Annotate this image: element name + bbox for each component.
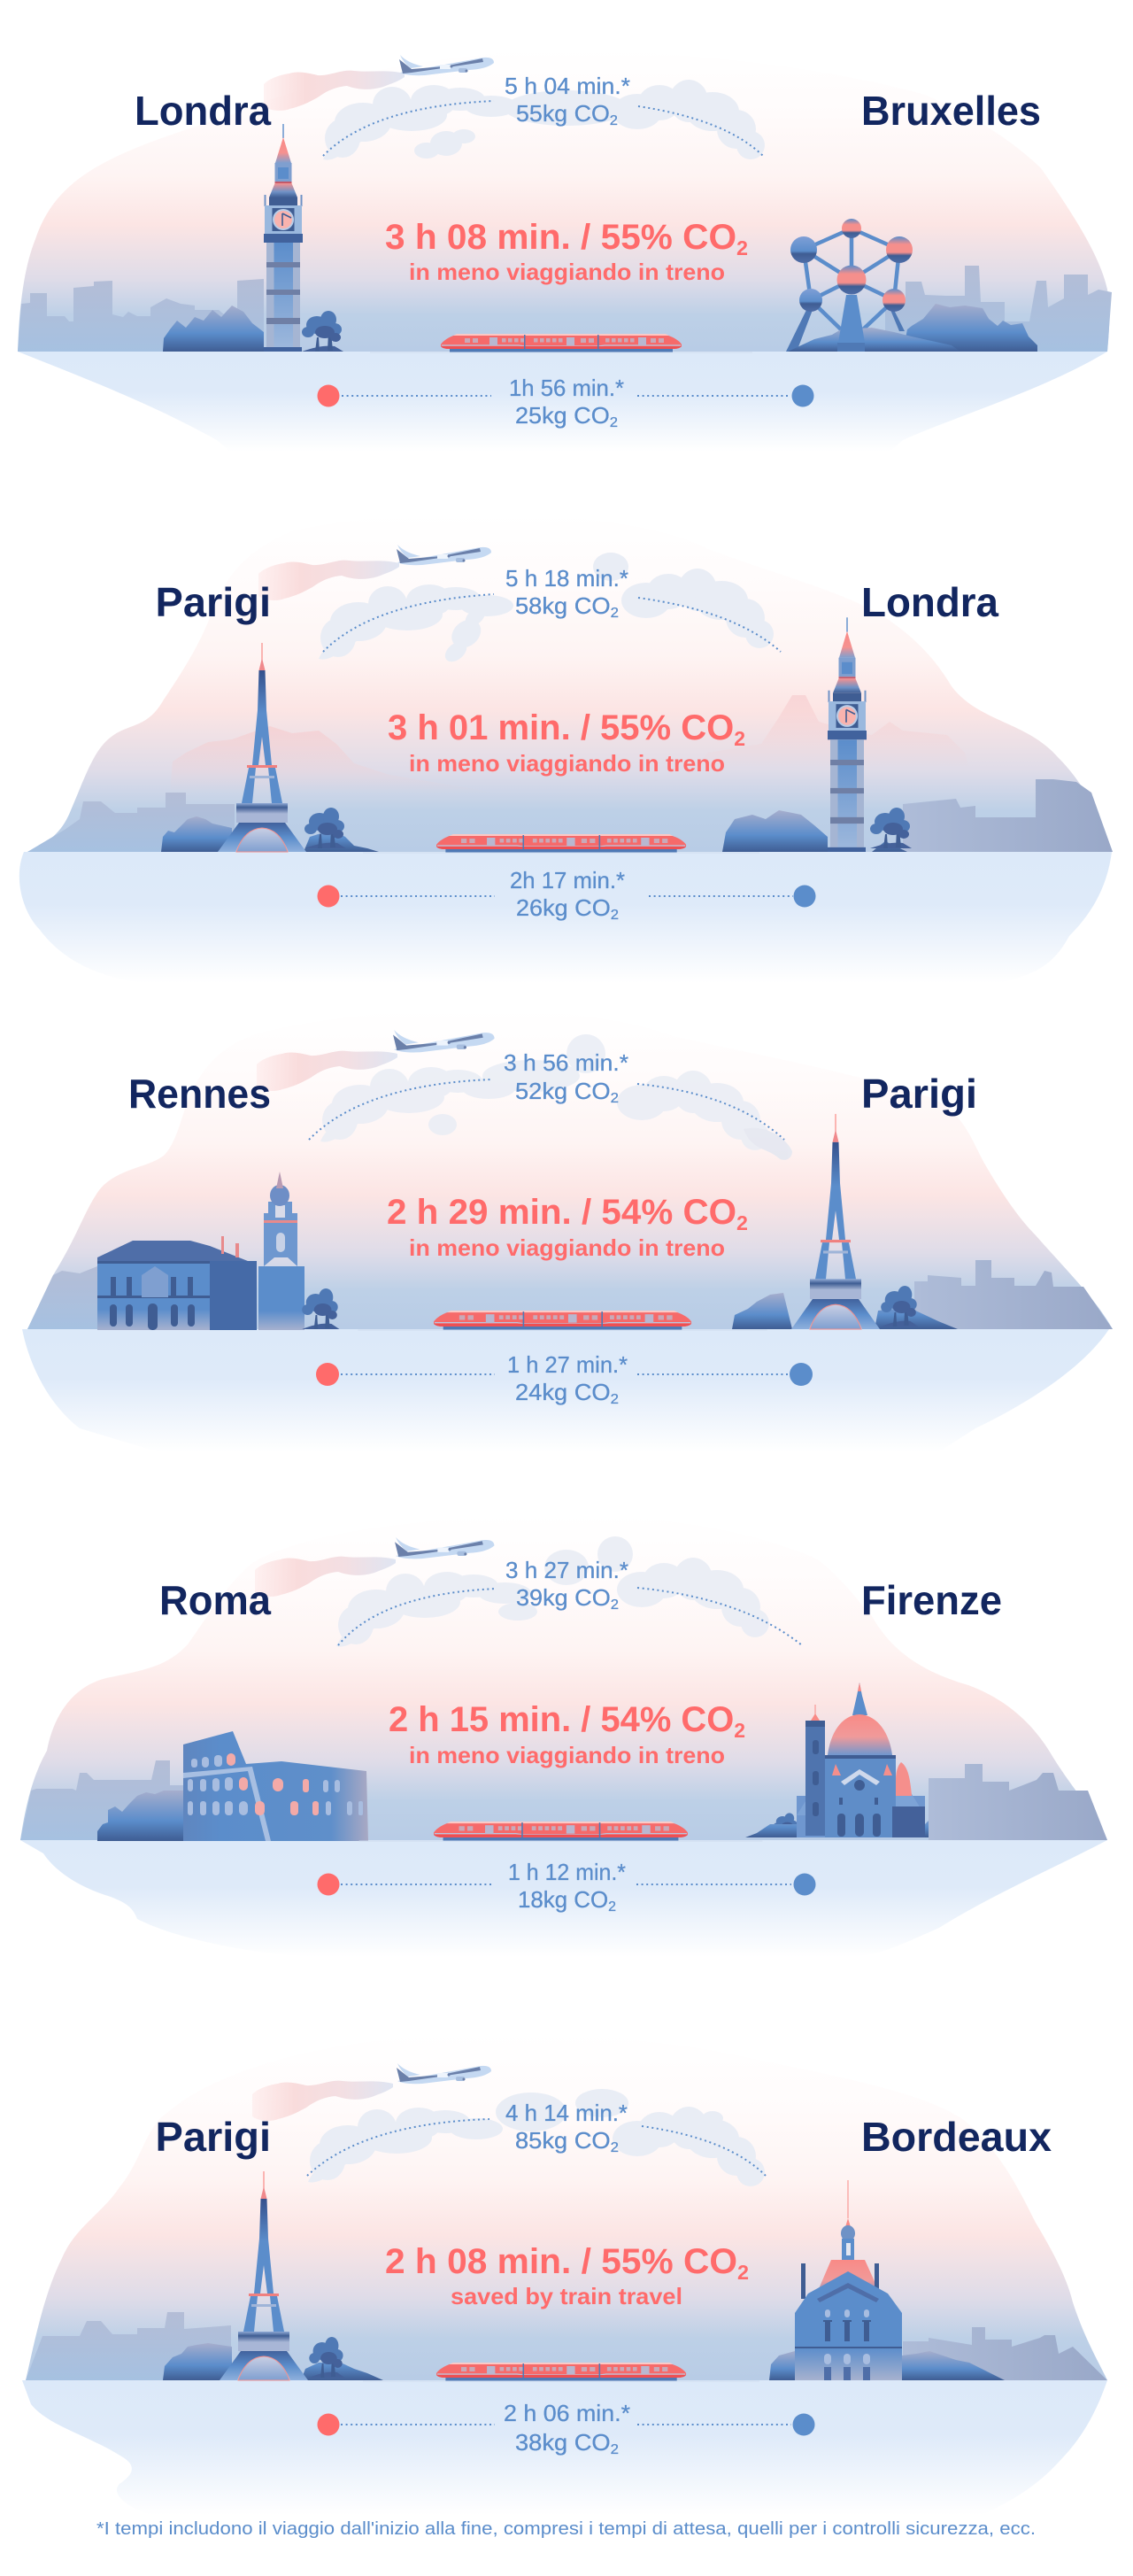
rail line right (636, 1884, 791, 1885)
clouds (336, 1536, 769, 1647)
flight time: 4 h 14 min.* (505, 2100, 628, 2126)
water backdrop (18, 352, 1107, 452)
water backdrop (20, 1840, 1107, 1957)
saving caption: in meno viaggiando in treno (409, 1234, 725, 1261)
flight path left (307, 2119, 489, 2176)
flight time: 3 h 27 min.* (505, 1557, 628, 1583)
icon: Big Ben (264, 124, 303, 352)
panel: Rennes to Parigi (22, 1009, 1113, 1452)
flight path left (309, 1079, 491, 1140)
flight CO2: 2 (611, 2140, 619, 2155)
bushes right (722, 810, 907, 852)
icon: Florence cathedral (797, 1683, 925, 1837)
saving headline: 2 (736, 1211, 748, 1234)
title: destination: Londra (861, 579, 998, 625)
flight path right (638, 598, 781, 652)
saving caption: saved by train travel (451, 2283, 682, 2309)
flight CO2: 2 (611, 1091, 619, 1106)
flight time: 3 h 56 min.* (504, 1049, 628, 1076)
contrail (252, 2081, 393, 2121)
flight CO2: 52kg CO (515, 1078, 606, 1104)
sky backdrop (27, 1009, 1113, 1329)
contrail (257, 1051, 397, 1091)
icon: train (363, 834, 759, 853)
saving caption: in meno viaggiando in treno (409, 259, 725, 285)
bushes right (903, 304, 1037, 352)
marker: destination (793, 2414, 814, 2435)
clouds (320, 1034, 792, 1160)
icon: tree (774, 1813, 798, 1837)
saving headline: 2 (734, 727, 745, 750)
train CO2: 2 (611, 2442, 619, 2457)
rail line left (341, 1373, 495, 1375)
train time: 2 h 06 min.* (504, 2400, 630, 2426)
train CO2: 2 (611, 1392, 619, 1407)
bushes left (161, 816, 379, 852)
train time: 1 h 12 min.* (508, 1859, 626, 1885)
clouds (319, 553, 774, 666)
marker: destination (793, 1874, 816, 1895)
title: destination: Bordeaux (861, 2114, 1052, 2160)
icon: plane (397, 2063, 491, 2084)
skyline right (885, 266, 1112, 352)
saving headline: 2 (737, 2261, 749, 2284)
rail line right (637, 1373, 788, 1375)
panel: Londra to Bruxelles (18, 49, 1112, 452)
flight CO2: 39kg CO (516, 1584, 607, 1611)
saving caption: in meno viaggiando in treno (409, 1742, 725, 1768)
flight CO2: 58kg CO (515, 592, 606, 619)
marker: origin (317, 384, 340, 407)
icon: plane (393, 1030, 495, 1053)
train time: 1h 56 min.* (509, 375, 624, 401)
flight CO2: 2 (610, 113, 618, 128)
flight path left (323, 101, 494, 156)
flight path right (642, 2126, 767, 2178)
rail line left (341, 2424, 495, 2425)
marker: origin (317, 2414, 340, 2435)
rail line right (637, 395, 788, 397)
title: destination: Firenze (861, 1577, 1002, 1623)
contrail (258, 561, 399, 600)
skyline right (929, 1764, 1107, 1840)
icon: plane (397, 545, 491, 565)
skyline left (18, 279, 264, 352)
icon: Eiffel Tower (791, 1114, 880, 1329)
pink mountains (170, 695, 969, 793)
icon: Eiffel Tower (220, 2171, 308, 2380)
icon: train (358, 1311, 767, 1330)
water backdrop (19, 852, 1112, 983)
sky backdrop (27, 514, 1113, 852)
marker: origin (317, 886, 340, 907)
marker: destination (791, 384, 814, 407)
skyline left (27, 1266, 97, 1329)
saving headline: 2 h 15 min. / 54% CO (389, 1700, 735, 1739)
train CO2: 25kg CO (515, 402, 606, 429)
sky backdrop (26, 2034, 1107, 2380)
marker: destination (793, 886, 816, 907)
water backdrop (22, 2380, 1107, 2515)
train CO2: 26kg CO (516, 894, 607, 921)
train time: 1 h 27 min.* (507, 1351, 628, 1378)
icon: tree (302, 311, 343, 352)
title: origin: Parigi (156, 579, 271, 625)
saving caption: in meno viaggiando in treno (409, 750, 725, 777)
sky backdrop (18, 49, 1109, 352)
rail line right (649, 895, 793, 897)
title: origin: Parigi (156, 2114, 271, 2160)
skyline left (20, 1760, 186, 1840)
contrail (264, 71, 405, 111)
flight path right (638, 106, 763, 156)
icon: tree (309, 2337, 344, 2378)
rail line left (341, 895, 495, 897)
icon: plane (395, 1537, 494, 1559)
marker: origin (316, 1363, 339, 1386)
train CO2: 2 (608, 1899, 616, 1915)
flight path right (637, 1084, 784, 1140)
panel: Parigi to Bordeaux (22, 2034, 1107, 2515)
flight path left (323, 594, 494, 652)
icon: Colosseum (183, 1731, 368, 1841)
flight time: 5 h 04 min.* (505, 73, 630, 99)
flight path right (637, 1588, 802, 1645)
saving headline: 3 h 08 min. / 55% CO (385, 218, 731, 257)
sky backdrop (20, 1514, 1107, 1840)
saving headline: 3 h 01 min. / 55% CO (388, 708, 734, 747)
bushes left (97, 1791, 183, 1841)
icon: Atomium (786, 219, 960, 352)
clouds (308, 2089, 765, 2186)
icon: tree (304, 808, 346, 848)
title: destination: Bruxelles (861, 88, 1041, 134)
bushes right (745, 1811, 967, 1837)
train CO2: 18kg CO (518, 1886, 609, 1913)
skyline right (903, 2327, 1107, 2380)
water backdrop (22, 1329, 1109, 1452)
skyline left (27, 793, 235, 852)
title: origin: Roma (159, 1577, 271, 1623)
rail line right (637, 2424, 791, 2425)
train CO2: 2 (610, 415, 618, 430)
title: origin: Londra (135, 88, 271, 134)
icon: tree (870, 808, 912, 848)
icon: plane (399, 55, 494, 75)
saving headline: 2 h 08 min. / 55% CO (385, 2242, 731, 2281)
skyline left (26, 2312, 231, 2380)
bushes left (163, 2343, 383, 2380)
bushes right (769, 2351, 1005, 2380)
icon: Big Ben (828, 617, 867, 852)
flight time: 5 h 18 min.* (505, 565, 628, 592)
rail line left (342, 395, 491, 397)
rail line left (341, 1884, 491, 1885)
title: origin: Rennes (128, 1071, 271, 1117)
icon: tree (881, 1286, 919, 1327)
saving headline: 2 (736, 236, 748, 259)
train CO2: 24kg CO (515, 1379, 606, 1405)
train time: 2h 17 min.* (510, 867, 625, 893)
icon: train (363, 2363, 759, 2381)
flight CO2: 55kg CO (516, 100, 607, 127)
flight CO2: 85kg CO (515, 2127, 606, 2154)
icon: train (359, 1822, 762, 1841)
marker: destination (790, 1363, 813, 1386)
train CO2: 2 (611, 908, 619, 923)
icon: train (370, 334, 752, 352)
contrail (255, 1557, 396, 1597)
flight CO2: 2 (611, 1597, 619, 1613)
marker: origin (317, 1874, 340, 1895)
flight CO2: 2 (611, 606, 619, 621)
icon: Eiffel Tower (218, 643, 306, 852)
icon: Bordeaux building (795, 2180, 902, 2380)
title: destination: Parigi (861, 1071, 977, 1117)
flight path left (338, 1589, 497, 1645)
clouds (323, 80, 765, 160)
saving headline: 2 h 29 min. / 54% CO (387, 1193, 733, 1232)
skyline right (903, 779, 1113, 852)
train CO2: 38kg CO (515, 2429, 606, 2456)
panel: Roma to Firenze (20, 1514, 1107, 1957)
icon: Rennes town hall (97, 1172, 304, 1330)
bushes left (163, 306, 264, 352)
icon: tree (302, 1288, 340, 1329)
footnote: *I tempi includono il viaggio dall'inizio alla fine, compresi i tempi di attesa, quelli per i controlli sicurezza, ecc. (96, 2519, 1036, 2539)
panel: Parigi to Londra (19, 514, 1113, 983)
bushes right (732, 1293, 958, 1329)
saving headline: 2 (734, 1719, 745, 1742)
skyline right (914, 1260, 1113, 1329)
